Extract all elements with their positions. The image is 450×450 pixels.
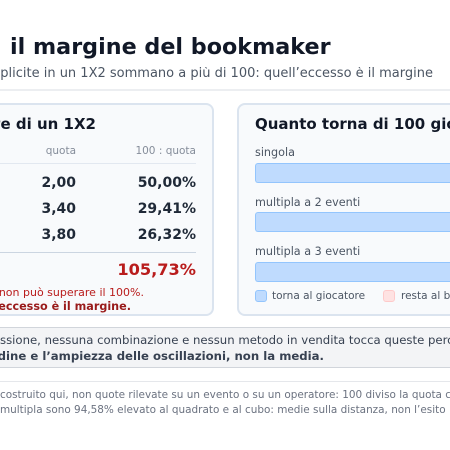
row 3 percent: 26,32% <box>138 227 196 243</box>
legend swatch: torna al giocatore <box>255 290 267 302</box>
bar: multipla 2 <box>255 212 450 232</box>
bar label: singola: singola <box>255 146 295 159</box>
title: il margine del bookmaker <box>10 34 331 60</box>
panel: quanto torna <box>237 103 450 316</box>
legend label: torna al giocatore: torna al giocatore <box>272 290 365 302</box>
footnote line 1: costruito qui, non quote rilevate su un evento o su un operatore: 100 diviso la quota c <box>0 389 450 401</box>
panel: quote di un 1X2 <box>0 103 214 316</box>
callout <box>0 327 450 368</box>
legend swatch: resta al bookmaker <box>383 290 395 302</box>
row 3 quota: 3,80 <box>41 227 76 243</box>
footer rule <box>0 381 450 382</box>
footnote line 2: multipla sono 94,58% elevato al quadrato e al cubo: medie sulla distanza, non l’esito <box>0 404 446 416</box>
total percent: 105,73% <box>117 260 196 279</box>
row 2 percent: 29,41% <box>138 201 196 217</box>
bar: multipla 3 <box>255 262 450 282</box>
row 2 quota: 3,40 <box>41 201 76 217</box>
bar: singola <box>255 163 450 183</box>
column header: 100 : quota: 100 : quota <box>135 145 196 157</box>
bar label: multipla 2: multipla a 2 eventi <box>255 196 360 209</box>
row 1 quota: 2,00 <box>41 175 76 191</box>
table rule <box>0 163 196 164</box>
header rule <box>0 89 450 91</box>
column header: quota: quota <box>46 145 76 157</box>
total rule <box>0 252 196 253</box>
bar label: multipla 3: multipla a 3 eventi <box>255 245 360 258</box>
row 1 percent: 50,00% <box>138 175 196 191</box>
